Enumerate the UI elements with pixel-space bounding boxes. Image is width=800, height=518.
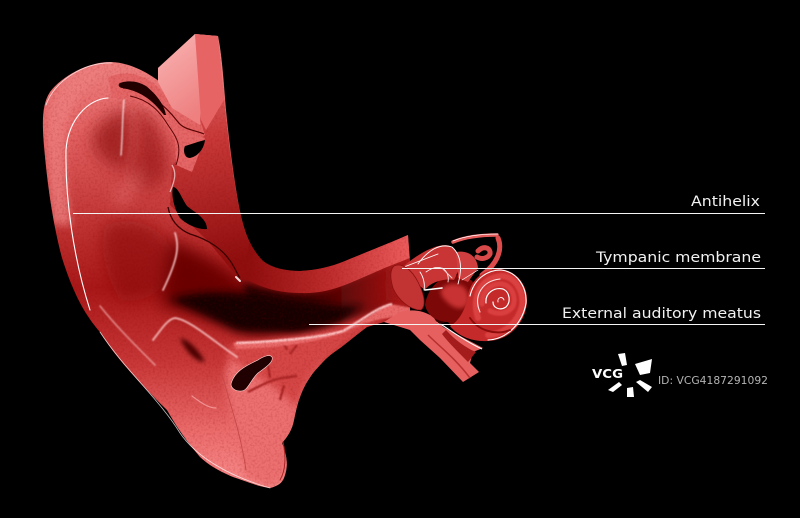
label: Tympanic membrane: Tympanic membrane <box>595 250 761 266</box>
canal floor highlight <box>233 304 412 349</box>
cochlea <box>450 269 527 341</box>
label: External auditory meatus: External auditory meatus <box>562 306 761 322</box>
inner ear <box>391 234 527 341</box>
helix rim <box>46 63 112 225</box>
cartilage fold lines <box>123 88 240 278</box>
top band of canal <box>248 235 410 294</box>
cartilage gap: long <box>172 187 207 229</box>
lobe veins <box>248 342 297 400</box>
cartilage gap: lobe <box>231 356 272 391</box>
outer ear body <box>42 34 410 488</box>
tragus flap <box>158 34 201 125</box>
canal darkest zone <box>170 292 365 332</box>
cochlear spiral <box>470 270 526 340</box>
logo petals <box>608 353 652 397</box>
watermark: VCG logo <box>592 353 652 397</box>
semicircular canals <box>404 234 500 290</box>
concha shadow <box>103 221 175 301</box>
cartilage gap: small <box>184 140 205 158</box>
upper bowl shading <box>92 108 132 170</box>
lobe shadow <box>180 338 205 362</box>
texture <box>43 40 410 488</box>
lower canal flap <box>384 310 483 382</box>
white highlights <box>46 63 285 488</box>
canal upper wall <box>243 255 410 332</box>
eardrum <box>391 265 424 310</box>
neck tissue <box>170 34 300 280</box>
ear illustration <box>42 34 410 488</box>
inner fold <box>108 73 205 172</box>
watermark: image ID: ID: VCG4187291092 <box>658 375 768 387</box>
lobe <box>225 330 340 488</box>
neck band edge <box>195 34 224 130</box>
vestibule <box>425 275 500 340</box>
logo wordmark: VCG <box>592 367 623 381</box>
cartilage gap: upper <box>119 81 166 115</box>
label: Antihelix: Antihelix <box>691 194 760 210</box>
